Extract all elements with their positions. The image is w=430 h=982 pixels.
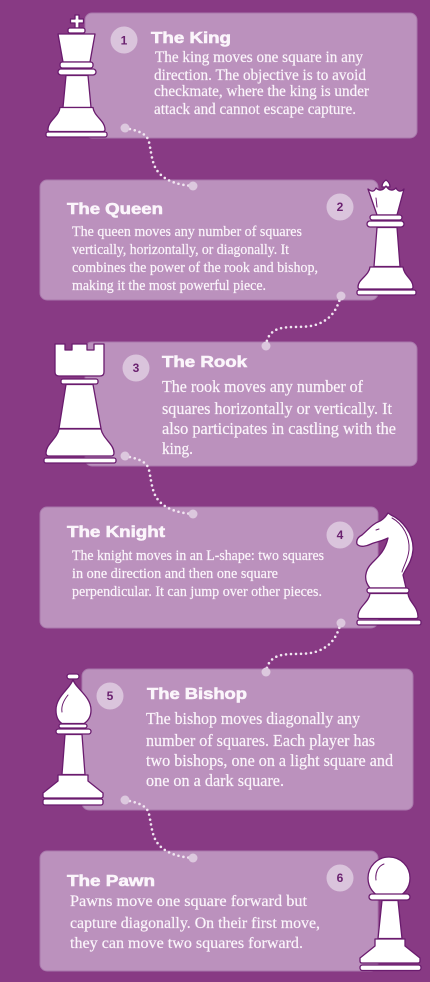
text: bishop description <box>146 709 394 790</box>
panel: the rook <box>85 342 417 466</box>
connector: knight to bishop <box>262 618 346 676</box>
connector: rook to knight <box>120 452 198 518</box>
text: knight description <box>72 548 324 600</box>
panel: the queen <box>40 180 378 300</box>
heading: the queen: The Queen <box>67 201 163 218</box>
heading: the knight: The Knight <box>67 524 165 541</box>
heading: the rook: The Rook <box>162 354 247 371</box>
text: rook description: king. <box>162 439 193 458</box>
text: queen description: vertically, horizontally, or diagonally. It <box>72 242 289 258</box>
number badge 3: 3 <box>133 361 140 375</box>
text: bishop description: one on a dark square. <box>146 771 284 790</box>
text: knight description: perpendicular. It can jump over other pieces. <box>72 584 322 600</box>
text: king description: direction. The objective is to avoid <box>154 67 366 84</box>
number badge 1 <box>110 26 138 54</box>
number badge 6: 6 <box>337 871 344 885</box>
panel: the bishop <box>82 669 413 810</box>
icon: pawn piece <box>360 857 421 970</box>
panel: the king <box>85 13 417 138</box>
panel: the pawn <box>40 851 378 971</box>
text: rook description: The rook moves any number of <box>162 377 363 396</box>
text: queen description: making it the most powerful piece. <box>72 278 266 294</box>
text: queen description: combines the power of the rook and bishop, <box>72 260 318 276</box>
number badge 6 <box>326 864 354 892</box>
number badge 4 <box>326 522 354 548</box>
icon: queen piece <box>357 180 416 295</box>
number badge 4: 4 <box>337 528 344 542</box>
text: rook description: also participates in castling with the <box>162 419 396 438</box>
heading: the pawn: The Pawn <box>67 873 155 890</box>
number badge 3 <box>122 354 150 382</box>
number badge 2: 2 <box>337 200 344 214</box>
text: king description: The king moves one square in any <box>155 49 363 66</box>
heading: the bishop: The Bishop <box>147 686 247 703</box>
text: pawn description: they can move two squares forward. <box>70 935 303 952</box>
text: pawn description: Pawns move one square forward but <box>70 893 308 910</box>
text: knight description: in one direction and then one square <box>72 566 278 582</box>
icon: king piece <box>46 15 107 137</box>
connector: queen to rook <box>262 292 346 350</box>
icon: rook piece <box>44 344 116 463</box>
text: king description: checkmate, where the king is under <box>154 83 370 100</box>
connector: king to queen <box>120 124 198 190</box>
text: pawn description <box>70 893 320 952</box>
text: bishop description: number of squares. Each player has <box>146 731 375 750</box>
text: bishop description: two bishops, one on a light square and <box>146 751 394 770</box>
text: bishop description: The bishop moves diagonally any <box>146 709 361 728</box>
heading: the king: The King <box>151 30 231 47</box>
text: queen description: The queen moves any number of squares <box>72 224 302 240</box>
text: pawn description: capture diagonally. On their first move, <box>70 915 320 932</box>
connector: bishop to pawn <box>120 796 198 862</box>
text: queen description <box>72 224 318 294</box>
number badge 2 <box>326 194 354 220</box>
number badge 5 <box>96 682 124 710</box>
number badge 5: 5 <box>107 689 114 703</box>
icon: knight piece <box>357 513 421 625</box>
panel: the knight <box>40 507 378 628</box>
number badge 1: 1 <box>121 34 128 48</box>
text: king description <box>154 49 370 118</box>
text: rook description <box>162 377 396 458</box>
text: rook description: squares horizontally or vertically. It <box>162 399 392 418</box>
text: king description: attack and cannot escape capture. <box>154 101 356 118</box>
icon: bishop piece <box>43 674 103 805</box>
text: knight description: The knight moves in an L-shape: two squares <box>72 548 324 564</box>
